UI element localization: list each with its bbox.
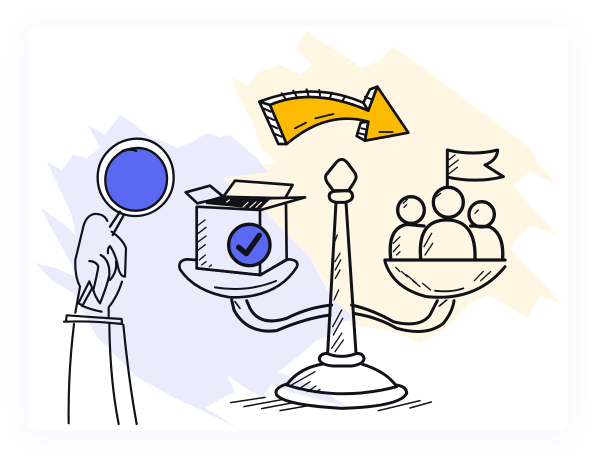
- icon: flag: [447, 150, 503, 187]
- icon: check badge: [229, 224, 270, 266]
- icon: people group: [390, 187, 503, 258]
- arrow: [259, 87, 408, 144]
- icon: scale pillar: [276, 159, 431, 411]
- icon: shadow lines under scale base left: [231, 397, 310, 411]
- icon: left scale pan: [179, 259, 297, 297]
- icon: scale arms: [232, 300, 454, 332]
- scale, arrow and people: [232, 87, 505, 411]
- icon: cuff and sleeve: [64, 315, 137, 424]
- icon: scale base: [276, 364, 431, 411]
- brush stroke: cream background: [220, 30, 563, 343]
- icon: hand: [75, 214, 126, 317]
- icon: right scale pan: [385, 260, 505, 297]
- panel: card background: [28, 26, 568, 431]
- left pan and box: [179, 181, 305, 297]
- brush stroke: lavender background: [35, 115, 355, 428]
- icon: cardboard box: [186, 181, 305, 275]
- hand and magnifier: [64, 139, 310, 424]
- icon: magnifying glass: [98, 139, 174, 235]
